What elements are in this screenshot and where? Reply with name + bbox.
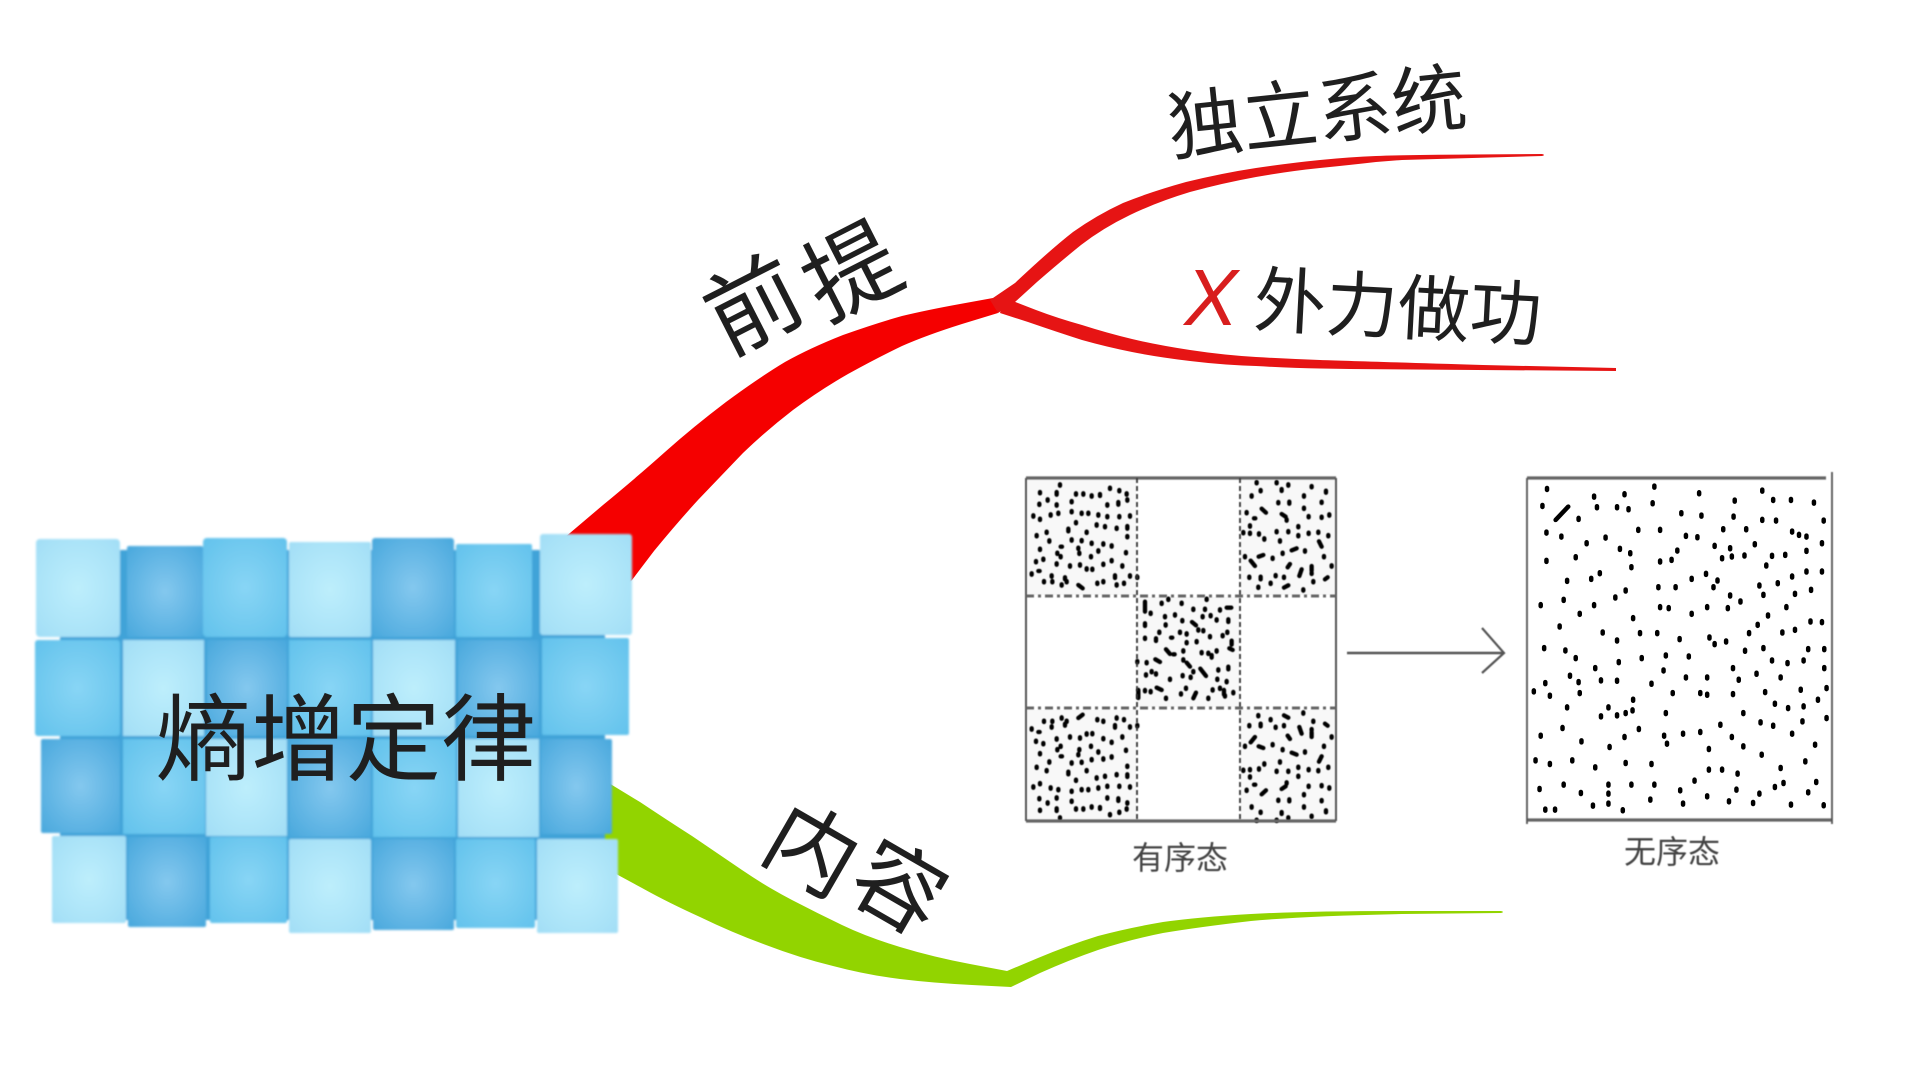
diagram: ordered state panel — [1026, 478, 1336, 876]
branch: 独立系统 red line — [990, 154, 1544, 313]
arrow: order to disorder — [1347, 628, 1504, 673]
label: 内容 — [747, 786, 962, 955]
label: 有序态: 有序态 — [1132, 840, 1228, 876]
label: 独立系统: 独立系统 — [1164, 56, 1471, 170]
diagram: disordered state panel — [1527, 472, 1832, 870]
label: 内容: 容 — [834, 824, 962, 955]
label: 无序态: 无序态 — [1624, 834, 1720, 870]
label: 前提: 提 — [786, 204, 918, 340]
label: 前提 — [688, 204, 918, 374]
label: 外力做功: 外力做功 — [1252, 262, 1544, 356]
icon: red X mark: X — [1182, 253, 1240, 342]
label: 前提: 前 — [688, 238, 820, 374]
branch: 内容 green trunk and line — [600, 777, 1503, 987]
central block: blue cube wall — [35, 534, 632, 933]
label: 内容: 内 — [747, 786, 875, 917]
branch: 外力做功 red line — [1000, 298, 1616, 371]
title: 熵增定律: 熵增定律 — [156, 688, 536, 794]
branch: 前提 red trunk — [555, 298, 998, 600]
